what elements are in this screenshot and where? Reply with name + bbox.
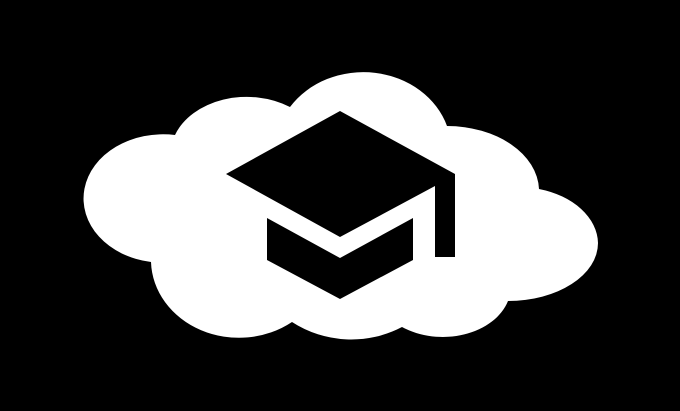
- cap base: [267, 218, 413, 299]
- icon: cloud: [84, 72, 598, 339]
- icon: graduation cap: [226, 111, 455, 299]
- cap board and tassel: [226, 111, 455, 257]
